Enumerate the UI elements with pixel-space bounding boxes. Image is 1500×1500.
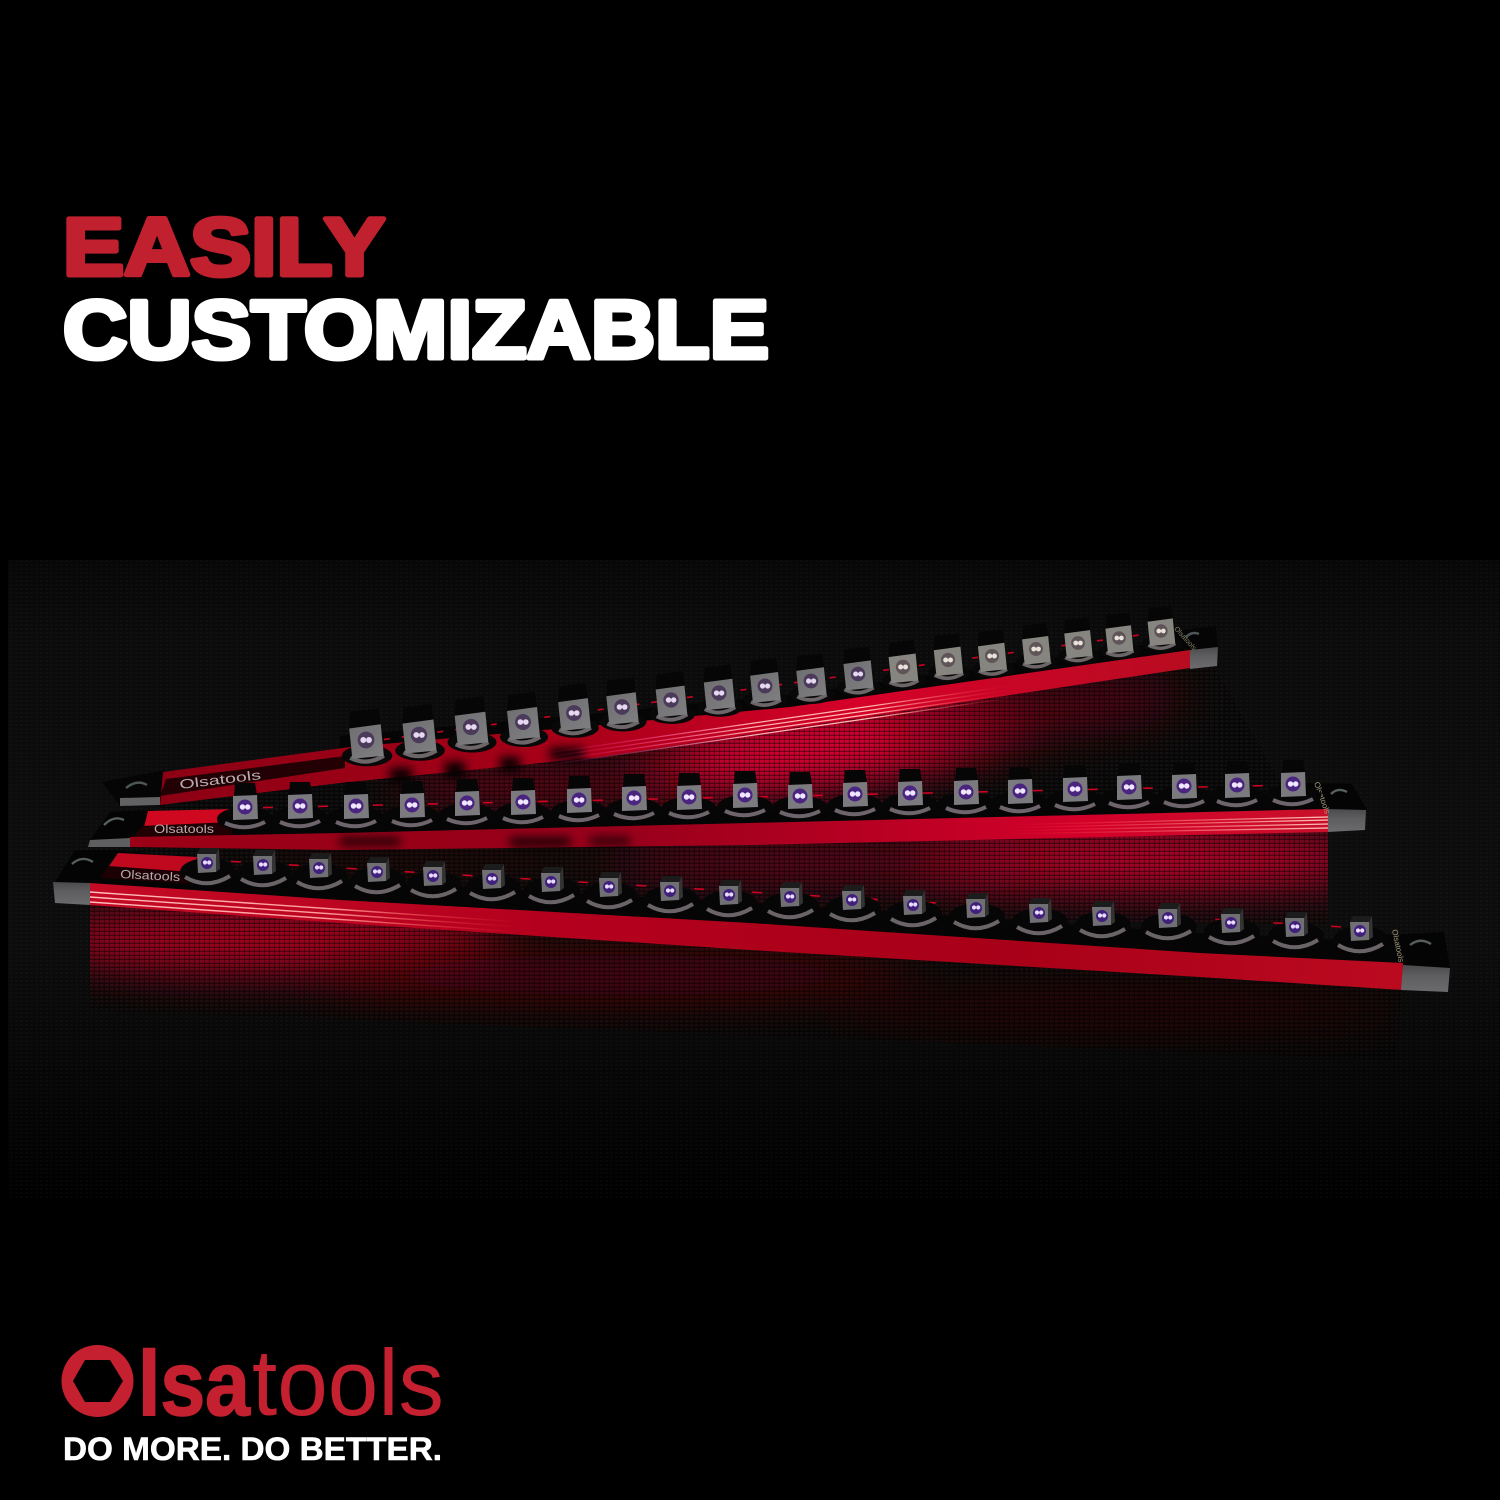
glow under bottom rail (30, 908, 1410, 1024)
bottom rail red body (90, 883, 1403, 990)
middle rail right plate (1305, 783, 1367, 811)
headline (63, 202, 769, 376)
bottom rail highlight stripes (90, 892, 520, 932)
weave texture (80, 660, 1420, 1060)
top rail left plate (102, 770, 165, 806)
middle rail mounting holes (104, 790, 1347, 825)
middle rail logo: Olsatools (154, 822, 214, 836)
top rail logo: Olsatools (179, 767, 262, 792)
rail: middle (88, 781, 1367, 850)
middle rail right cap (1328, 809, 1366, 832)
top rail logo panel (160, 756, 345, 796)
headline word: easily: EASILY (63, 202, 385, 293)
rail shadows (390, 748, 584, 782)
bottom rail logo panel (105, 853, 197, 878)
top rail right plate (1165, 626, 1218, 654)
top rail mounting holes (126, 633, 1199, 788)
bottom rail end logo: Olsatools (1390, 929, 1406, 963)
middle rail left cap (88, 838, 130, 847)
brand logo (62, 1330, 444, 1467)
rail shadows (340, 838, 630, 846)
glow under top rail (390, 671, 1191, 808)
sockets: bottom row (180, 848, 1389, 954)
middle rail logo backing (132, 822, 232, 838)
top rail red body (160, 650, 1190, 805)
rail: bottom (53, 850, 1450, 992)
middle rail left plate (90, 810, 232, 840)
bottom rail dark band (190, 870, 1403, 965)
middle rail highlight stripes (1000, 817, 1328, 834)
red light glow on fabric (30, 660, 1420, 1060)
middle rail red body (130, 809, 1328, 850)
middle rail dark band (230, 793, 1328, 838)
top rail dark band (340, 638, 1190, 750)
bottom rail logo: Olsatools (120, 867, 180, 884)
middle rail logo panel (142, 809, 232, 835)
fabric surface (8, 560, 1500, 1200)
top rail right cap (1190, 647, 1218, 669)
bottom rail logo backing (100, 866, 192, 884)
bottom rail left plate (55, 850, 200, 892)
rail: top (102, 626, 1218, 806)
glow under middle rail (220, 830, 1390, 890)
top rail highlight stripes (540, 686, 1010, 766)
logo wordmark bold: lsa (138, 1333, 251, 1435)
sockets: top row (342, 606, 1182, 766)
bottom rail left cap (53, 882, 90, 905)
logo icon: hex socket O: O (66, 1332, 134, 1431)
headline word: customizable: CUSTOMIZABLE (63, 283, 769, 376)
top rail left cap (120, 797, 160, 806)
sockets: middle row (217, 760, 1321, 831)
middle rail end logo: Olsatools (1312, 781, 1332, 815)
tagline: DO MORE. DO BETTER. (63, 1431, 442, 1467)
bottom rail right plate (1385, 932, 1450, 968)
logo wordmark light: tools (252, 1330, 444, 1435)
bottom rail mounting holes (72, 859, 1431, 945)
top rail end logo: Olsatools (1173, 626, 1198, 652)
bottom rail right cap (1401, 965, 1450, 992)
